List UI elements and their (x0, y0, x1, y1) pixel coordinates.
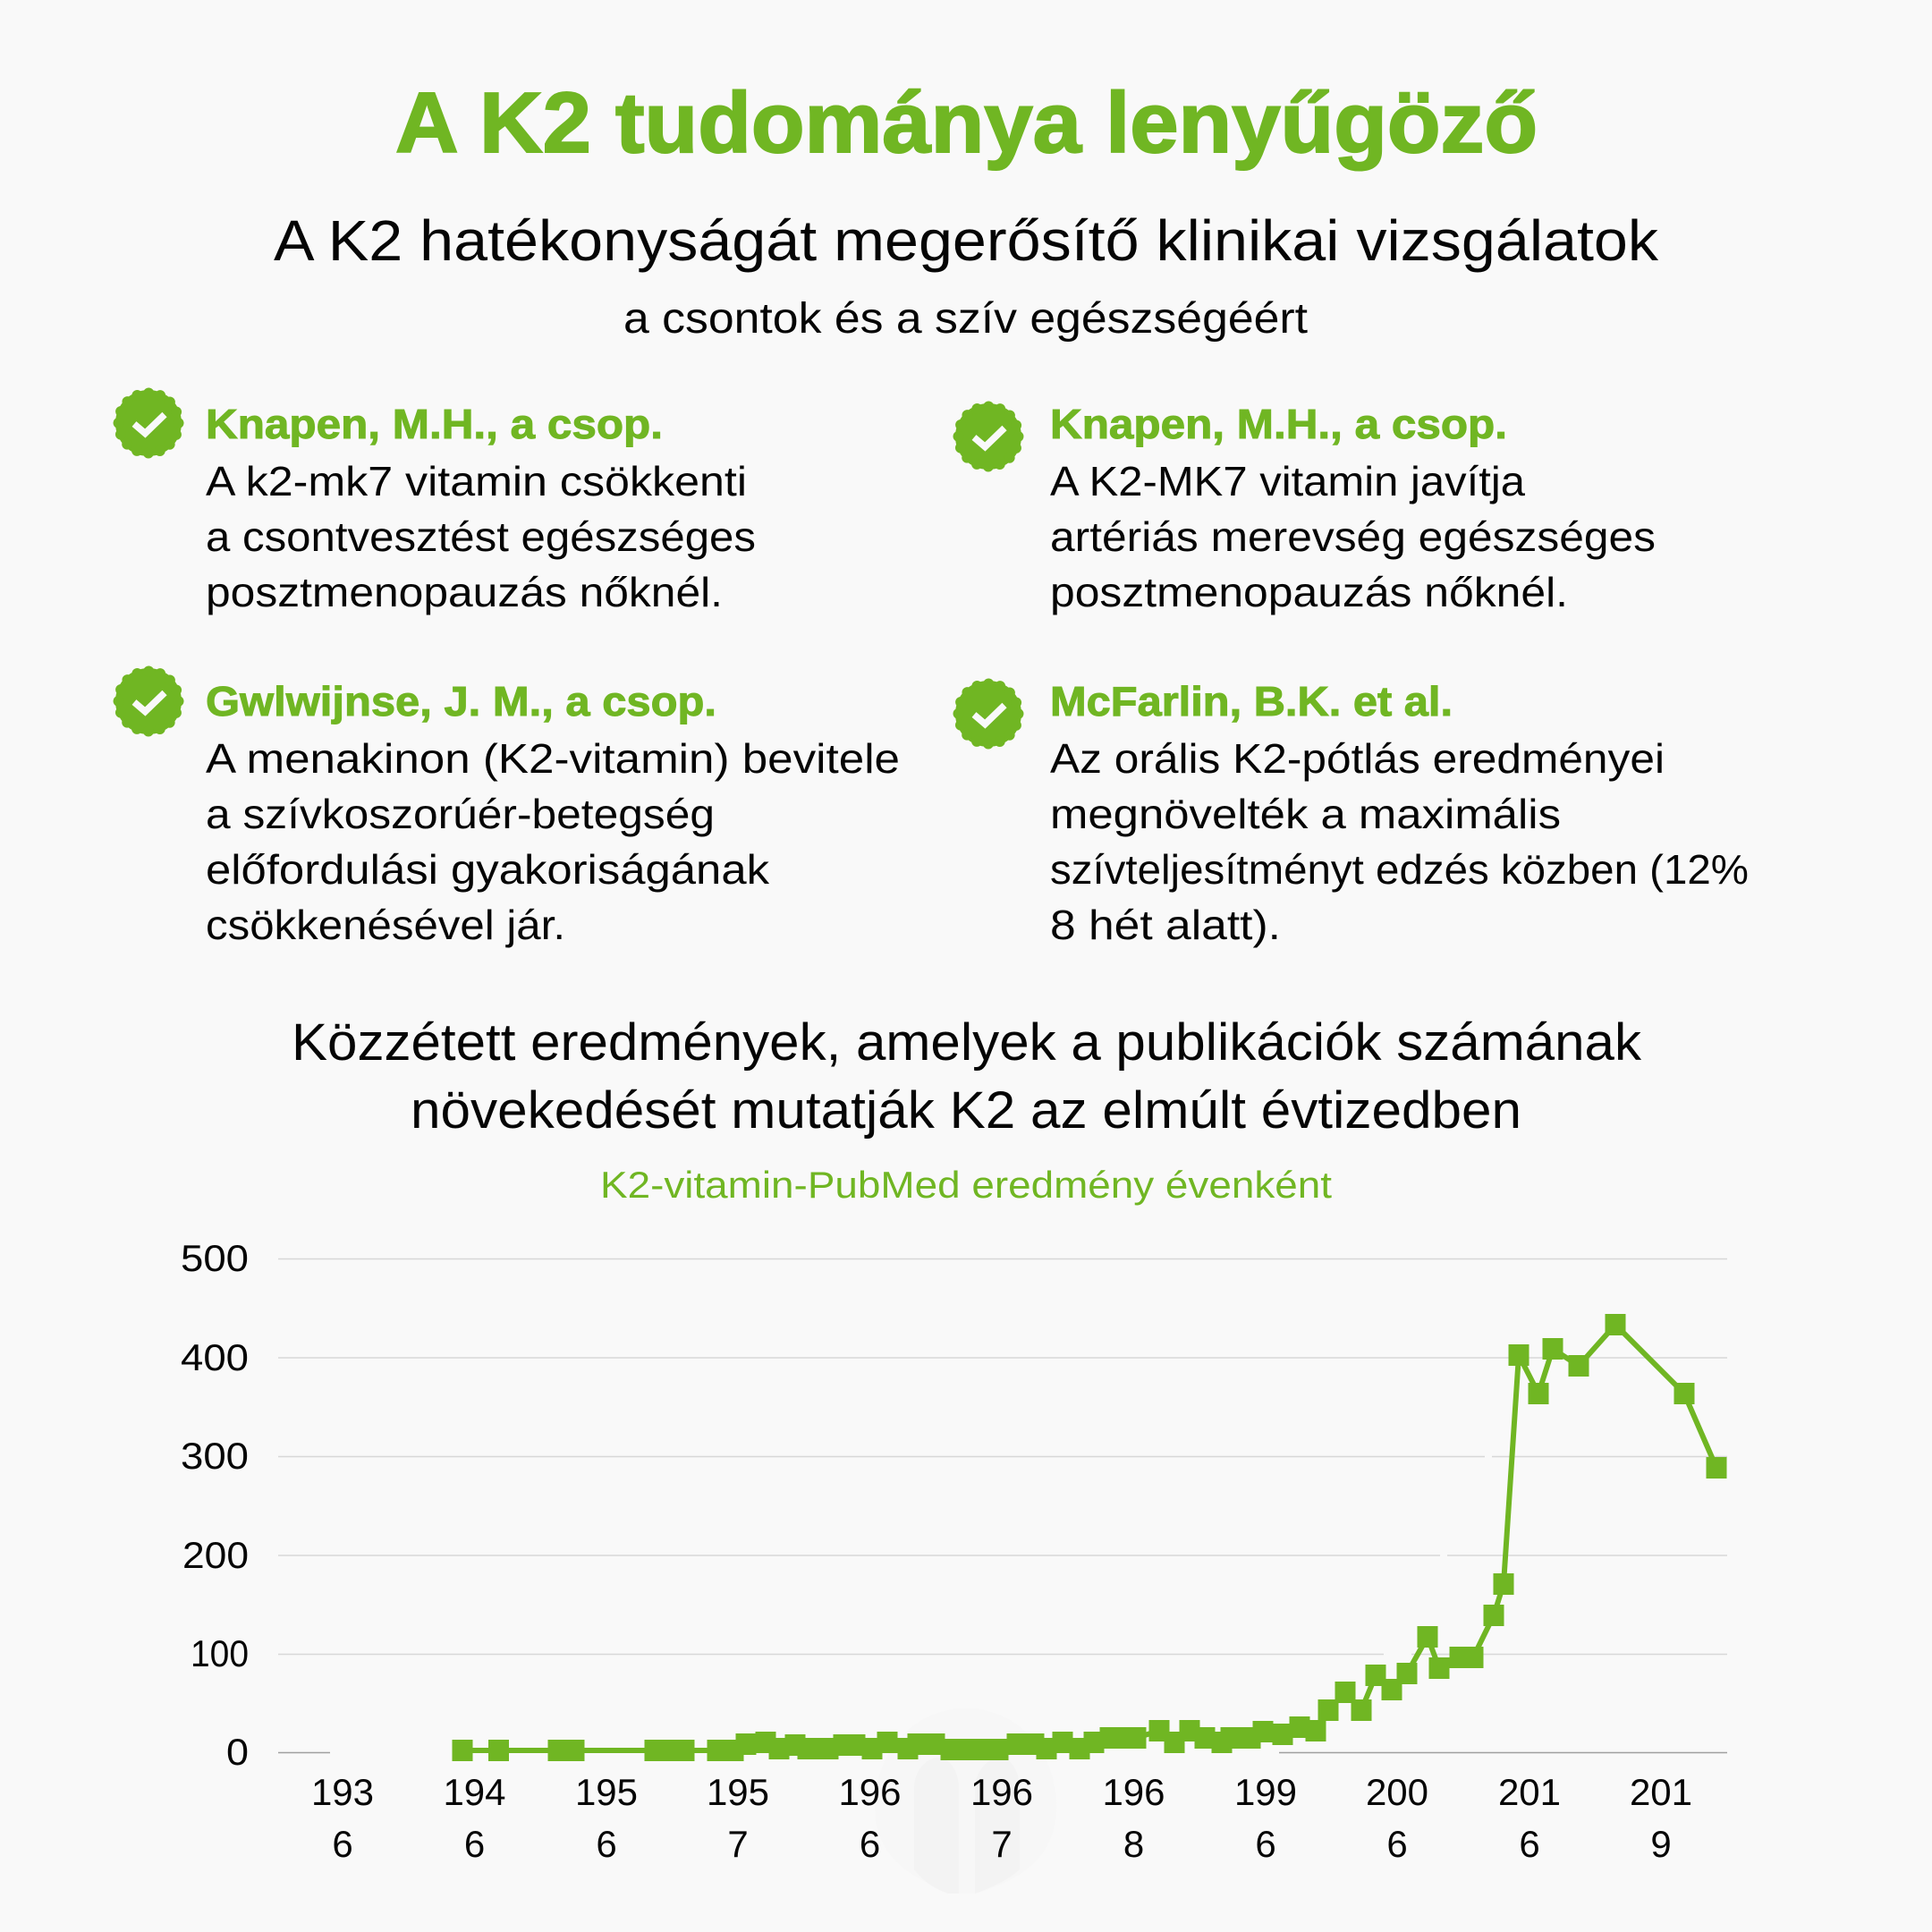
x axis labels: 201 (1630, 1771, 1692, 1813)
y axis labels: 500 (181, 1237, 249, 1279)
study block: Knapen bone: posztmenopauzás nőknél. (206, 569, 723, 615)
x axis labels: 6 (860, 1823, 880, 1865)
icon: check badge (115, 668, 182, 734)
x axis labels: 6 (332, 1823, 353, 1865)
study block: McFarlin: szívteljesítményt edzés közben (12% (1050, 846, 1749, 893)
icon: check badge (955, 681, 1021, 747)
study block: Knapen bone: A k2-mk7 vitamin csökkenti (206, 458, 747, 504)
x axis labels: 196 (970, 1771, 1033, 1813)
y axis labels: 300 (181, 1435, 249, 1477)
y axis labels: 400 (181, 1336, 249, 1378)
x axis labels: 6 (596, 1823, 617, 1865)
x axis labels: 199 (1234, 1771, 1297, 1813)
study block: Knapen bone: a csontvesztést egészséges (206, 513, 756, 560)
x axis labels: 196 (1102, 1771, 1165, 1813)
icon: check badge (115, 390, 182, 456)
x axis labels: 8 (1123, 1823, 1144, 1865)
watermark (875, 1708, 1056, 1894)
study block: Gwlwijnse: csökkenésével jár. (206, 902, 565, 948)
chart heading: növekedését mutatják K2 az elmúlt évtizedben (411, 1081, 1521, 1140)
x axis labels: 9 (1650, 1823, 1672, 1865)
x axis labels: 6 (1255, 1823, 1276, 1865)
study block: Knapen artery: posztmenopauzás nőknél. (1050, 569, 1568, 615)
study block: Knapen artery: A K2-MK7 vitamin javítja (1050, 458, 1525, 504)
chart heading (292, 1013, 1642, 1140)
y axis labels: 0 (226, 1731, 249, 1773)
x axis labels: 7 (991, 1823, 1013, 1865)
study block: Gwlwijnse: előfordulási gyakoriságának (206, 846, 770, 893)
study block: Knapen artery: artériás merevség egészséges (1050, 513, 1656, 560)
chart heading: Közzétett eredmények, amelyek a publikációk számának (292, 1013, 1642, 1072)
study block: Knapen artery: Knapen, M.H., a csop. (1050, 401, 1507, 447)
study block: Gwlwijnse: a szívkoszorúér-betegség (206, 791, 715, 837)
study block: McFarlin: megnövelték a maximális (1050, 791, 1561, 837)
data line (462, 1325, 1716, 1750)
x axis labels: 195 (575, 1771, 638, 1813)
study block: Knapen artery (955, 401, 1656, 615)
x axis labels: 7 (727, 1823, 749, 1865)
study block: Gwlwijnse (115, 668, 900, 948)
x axis labels: 195 (707, 1771, 769, 1813)
study block: McFarlin: Az orális K2-pótlás eredményei (1050, 735, 1665, 782)
x axis labels: 201 (1498, 1771, 1561, 1813)
study block: Gwlwijnse: Gwlwijnse, J. M., a csop. (206, 678, 716, 724)
x axis labels: 6 (1519, 1823, 1540, 1865)
grid lines (278, 1259, 1727, 1655)
x axis labels (311, 1771, 1692, 1865)
line chart (181, 1237, 1727, 1894)
chart subtitle: K2-vitamin-PubMed eredmény évenként (600, 1164, 1332, 1206)
icon: check badge (955, 403, 1021, 470)
data markers (453, 1314, 1726, 1761)
x axis labels: 194 (443, 1771, 506, 1813)
y axis labels: 200 (182, 1534, 249, 1576)
y axis labels: 100 (191, 1632, 249, 1674)
x axis labels: 196 (838, 1771, 902, 1813)
x axis labels: 200 (1366, 1771, 1428, 1813)
study block: McFarlin: 8 hét alatt). (1050, 902, 1281, 948)
study block: McFarlin (955, 678, 1749, 948)
study block: Knapen bone (115, 390, 756, 615)
y axis labels (181, 1237, 249, 1773)
title: A K2 tudománya lenyűgöző (395, 75, 1538, 171)
study block: Knapen bone: Knapen, M.H., a csop. (206, 401, 663, 447)
x axis line (278, 1751, 1727, 1753)
x axis labels: 6 (464, 1823, 485, 1865)
subtitle: A K2 hatékonyságát megerősítő klinikai vizsgálatok (274, 208, 1659, 273)
secondary subtitle: a csontok és a szív egészségéért (623, 295, 1308, 343)
study block: Gwlwijnse: A menakinon (K2-vitamin) bevitele (206, 735, 900, 782)
x axis labels: 193 (311, 1771, 374, 1813)
study block: McFarlin: McFarlin, B.K. et al. (1050, 678, 1453, 724)
x axis labels: 6 (1386, 1823, 1408, 1865)
